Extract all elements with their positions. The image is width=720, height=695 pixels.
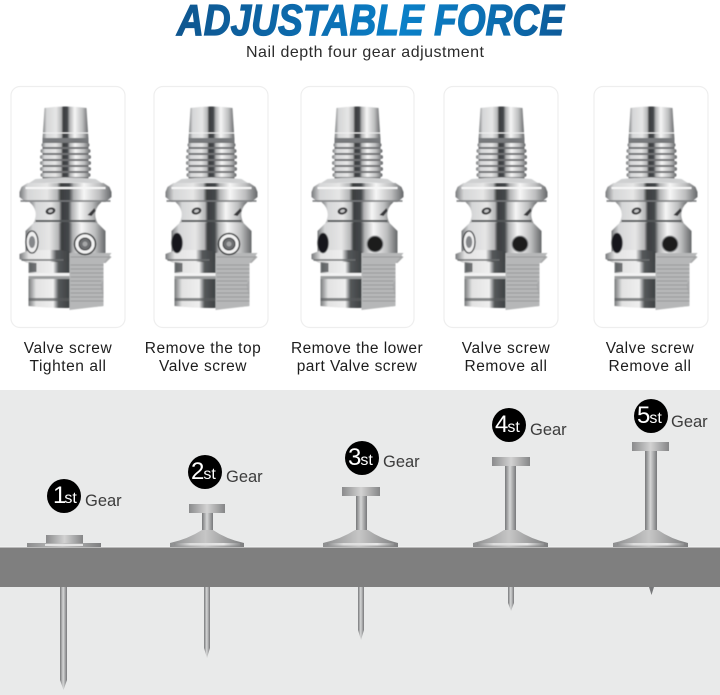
nail: 2nd gear (170, 504, 244, 658)
caption 3: Remove the lower (291, 340, 423, 357)
panel: valve 3 (301, 86, 414, 328)
label: 4st gear: Gear (530, 421, 567, 439)
panel: valve 4 (444, 86, 558, 328)
board cross-section (0, 546, 720, 587)
caption 5: Remove all (608, 358, 692, 375)
label: 3st gear (345, 441, 420, 475)
caption 4: Remove all (464, 358, 548, 375)
caption 4: Valve screw (462, 340, 550, 357)
label: 4st gear: 4st (495, 411, 520, 438)
caption 1: Tighten all (30, 358, 106, 375)
panel: valve 5 (594, 86, 708, 328)
label: 3st gear: 3st (348, 444, 373, 471)
label: 5st gear: Gear (671, 413, 708, 431)
nail: 1st gear (27, 535, 101, 690)
caption 5: Valve screw (606, 340, 694, 357)
label: 3st gear: Gear (383, 453, 420, 471)
panel: valve 1 (11, 86, 125, 328)
label: 2st gear: 2st (191, 458, 216, 485)
caption 1: Valve screw (24, 340, 112, 357)
caption 3: part Valve screw (297, 358, 418, 375)
nail: 4th gear (473, 457, 548, 611)
nail: 3rd gear (323, 487, 398, 640)
subtitle: Nail depth four gear adjustment (246, 44, 485, 61)
label: 1st gear (47, 479, 122, 513)
label: 5st gear: 5st (637, 402, 662, 429)
label: 5st gear (634, 399, 708, 433)
label: 2st gear (188, 455, 263, 489)
label: 4st gear (492, 408, 567, 442)
gear panel background (0, 390, 720, 695)
panel: valve 2 (154, 86, 268, 328)
label: 2st gear: Gear (226, 468, 263, 486)
label: 1st gear: Gear (85, 492, 122, 510)
nail: 5th gear (613, 442, 688, 595)
caption 2: Valve screw (159, 358, 247, 375)
label: 1st gear: 1st (53, 482, 77, 509)
caption 2: Remove the top (145, 340, 261, 357)
